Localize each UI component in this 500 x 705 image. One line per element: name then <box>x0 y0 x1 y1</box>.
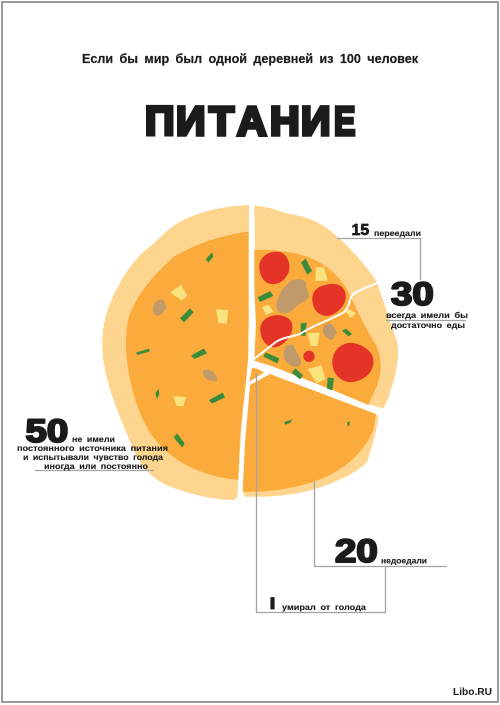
credit: Libo.RU <box>453 686 492 698</box>
label: 15 <box>352 222 421 239</box>
leader lines <box>35 238 466 612</box>
label: 15: переедали <box>374 228 421 238</box>
label: 30: 30 <box>391 277 434 312</box>
icon: pepperoni <box>259 252 374 382</box>
pizza chart <box>102 205 398 500</box>
label: 20: недоедали <box>381 556 427 566</box>
title: ПИТАНИ <box>145 98 330 144</box>
label: 50: постоянного источника питания <box>17 443 168 453</box>
label: 50: и испытывали чувство голода <box>23 452 163 462</box>
label: 50: иногда или постоянно <box>44 461 148 471</box>
label: 50: 50 <box>26 414 68 449</box>
label: 1: умирал от голода <box>282 602 366 612</box>
divider <box>253 282 378 360</box>
icon: green pepper <box>258 259 352 390</box>
label: 50: не имели <box>72 434 115 444</box>
label: 1 <box>270 595 366 613</box>
label: 50 <box>17 414 168 471</box>
slice: 20 underfed <box>243 374 378 497</box>
label: 30: всегда имели бы <box>386 310 468 320</box>
title: Е <box>334 98 355 144</box>
slices: 15 and 30 <box>253 206 398 408</box>
slice: 1 starved <box>249 368 264 382</box>
label: 1: I <box>270 595 276 613</box>
label: 20 <box>335 534 427 569</box>
slice: 50 without a steady food source <box>102 205 249 500</box>
label: 30 <box>386 277 468 330</box>
subtitle: Если бы мир был одной деревней из 100 человек <box>82 51 418 66</box>
icon: yellow cheese <box>262 267 356 383</box>
label: 15: 15 <box>352 222 369 239</box>
label: 20: 20 <box>335 534 378 569</box>
label: 30: достаточно еды <box>391 320 465 330</box>
icon: mushrooms <box>276 279 337 367</box>
